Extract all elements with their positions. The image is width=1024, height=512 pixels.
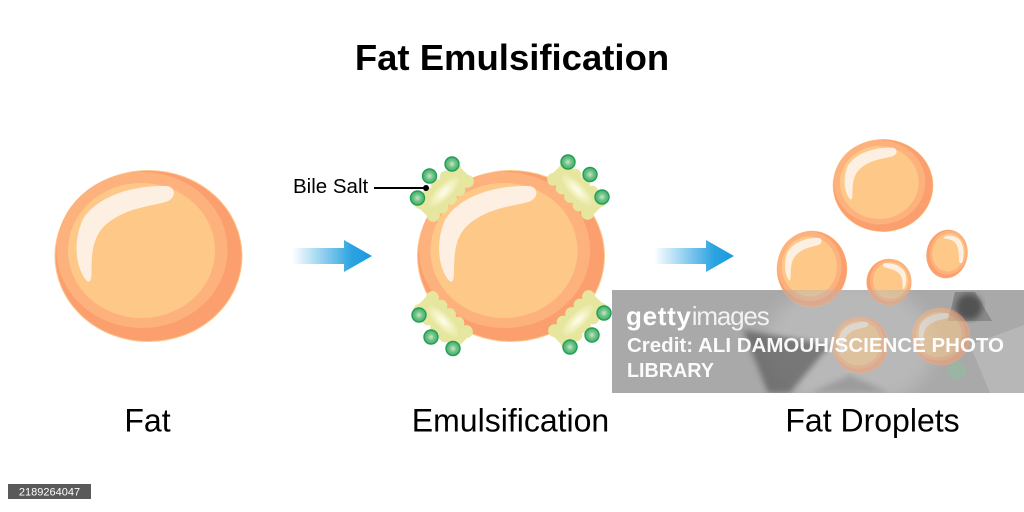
title: Fat Emulsification [355,37,669,78]
fat globule [55,170,242,342]
droplet: right [923,226,971,282]
bile salt: bottom left [410,288,476,356]
label: fat droplets: Fat Droplets [785,402,960,438]
label: emulsification: Emulsification [412,402,609,438]
droplet: top [833,139,933,232]
bile salt: bottom right [545,287,611,354]
bile salt: top right [544,155,610,223]
bile salt: top left [410,157,477,225]
droplet: centre [867,259,911,305]
arrow: fat to emulsification [292,240,372,272]
bile salt label [293,175,429,198]
bile salt label: Bile Salt [293,175,369,198]
fat droplets [777,139,971,307]
arrow: emulsification to droplets [654,240,734,272]
credit text: Credit: ALI DAMOUH/SCIENCE PHOTO [627,335,1004,357]
watermark panel: LIBRARY [627,360,715,382]
image id badge [8,484,91,499]
fat globule in emulsification [418,170,604,342]
getty images logo: gettyimages [626,301,770,331]
image id badge: 2189264047 [19,486,80,498]
droplet: left [777,231,847,307]
emulsification globule with bile salts [410,155,611,356]
droplets seen through watermark [782,290,970,380]
watermark panel [612,290,1024,393]
label: fat: Fat [124,402,171,438]
